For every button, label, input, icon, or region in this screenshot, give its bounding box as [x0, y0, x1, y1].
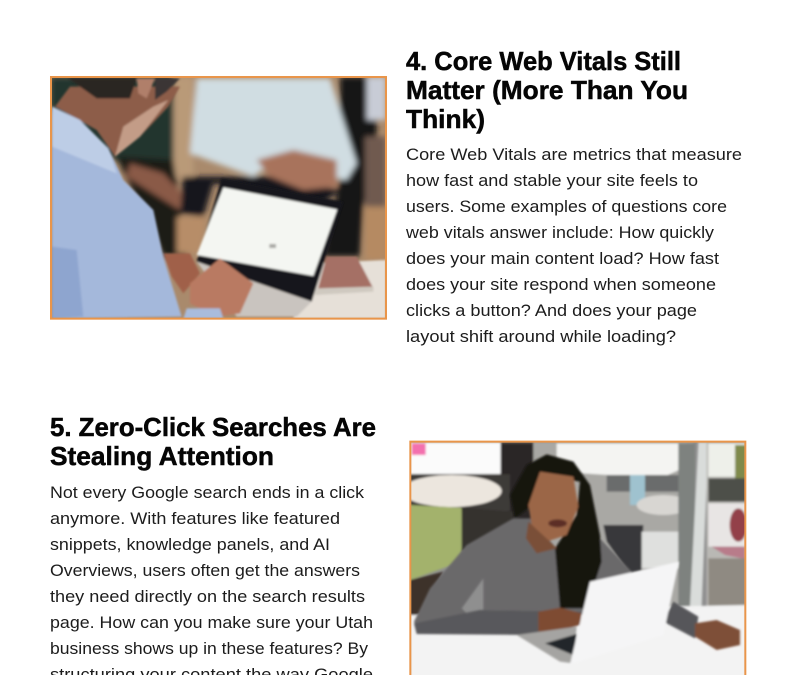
heading: section 4: Matter (More Than You	[406, 75, 688, 105]
hair	[510, 454, 602, 608]
blue shirt	[52, 146, 182, 318]
text block: section 4 body: Core Web Vitals are metrics that measure	[406, 145, 742, 164]
hands	[538, 608, 582, 632]
heading: section 5: 5. Zero-Click Searches Are	[50, 412, 376, 442]
photo: man using laptop	[50, 77, 386, 319]
text block: section 5 body: they need directly on the search results	[50, 587, 365, 606]
heading: section 5	[50, 412, 376, 471]
text block: section 5 body	[50, 483, 373, 675]
heading: section 4: 4. Core Web Vitals Still	[406, 46, 681, 76]
heading: section 4	[406, 46, 688, 134]
photo: woman using laptop	[402, 442, 747, 675]
text block: section 4 body: clicks a button? And does your page	[406, 301, 697, 320]
text block: section 5 body: Overviews, users often get the answers	[50, 561, 360, 580]
woman torso and arms	[414, 518, 632, 633]
hands	[163, 253, 200, 293]
laptop	[517, 627, 577, 663]
photo border	[51, 77, 386, 319]
text block: section 4 body: does your main content load? How fast	[406, 249, 719, 268]
laptop	[197, 178, 343, 302]
text block: section 5 body: anymore. With features like featured	[50, 509, 340, 528]
text block: section 4 body	[405, 145, 742, 346]
text block: section 4 body: users. Some examples of questions core	[406, 197, 727, 216]
text block: section 4 body: web vitals answer include: How quickly	[405, 223, 715, 242]
text block: section 5 body: Not every Google search ends in a click	[50, 483, 365, 502]
text block: section 4 body: layout shift around while loading?	[406, 327, 676, 346]
text block: section 5 body: snippets, knowledge panels, and AI	[50, 535, 330, 554]
table	[293, 260, 386, 319]
face	[528, 472, 578, 542]
man head	[55, 87, 180, 157]
text block: section 4 body: how fast and stable your site feels to	[406, 171, 698, 190]
text block: section 5 body: business shows up in these features? By	[50, 639, 369, 658]
heading: section 5: Stealing Attention	[50, 441, 274, 471]
text block: section 4 body: does your site respond when someone	[406, 275, 716, 294]
photo border	[410, 442, 745, 675]
text block: section 5 body: page. How can you make sure your Utah	[50, 613, 373, 632]
heading: section 4: Think)	[406, 104, 485, 134]
